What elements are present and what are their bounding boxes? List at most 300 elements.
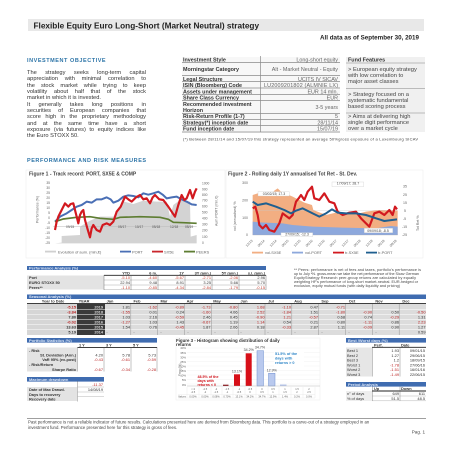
- period analysis table: 611: [419, 391, 425, 396]
- seasonal analysis table: --: [375, 331, 377, 335]
- investment style table: 3-5 years: [316, 105, 338, 111]
- performance analysis table: Port: [29, 275, 37, 280]
- histogram axis table: 1: [284, 387, 286, 391]
- best worst days table: 1.2: [394, 358, 399, 363]
- histogram axis table: 1: [272, 390, 274, 394]
- histogram axis table: <-3: [191, 387, 195, 391]
- figure 3 histogram: 34.2%: [244, 348, 255, 352]
- portfolio statistics table: -0.28: [147, 367, 156, 372]
- histogram axis table: 0.5: [260, 390, 264, 394]
- best worst days table: 16/01/16: [410, 367, 425, 372]
- seasonal analysis table: Oct: [349, 299, 356, 304]
- seasonal analysis table: 0.68: [337, 314, 345, 319]
- seasonal analysis table: -1.80: [336, 309, 346, 314]
- performance analysis table: -0.15: [256, 285, 265, 290]
- histogram axis table: -1.5: [214, 390, 219, 394]
- investment style table: EUR: [327, 96, 338, 102]
- peers note: weighting HF's performance of long-short market-neutral. EUR-hedged or: [294, 280, 419, 284]
- histogram axis table: -1: [238, 387, 241, 391]
- figure 2 panel: 06/17: [329, 239, 338, 248]
- seasonal analysis table: [27, 294, 426, 335]
- figure 2 panel: 12/18: [365, 239, 374, 248]
- legend: [45, 249, 210, 254]
- seasonal analysis table: -0.80: [229, 304, 238, 309]
- portfolio statistics table: -0.67: [94, 367, 103, 372]
- seasonal analysis table: 2014: [94, 330, 104, 335]
- portfolio statistics table: Sharpe Ratio: [52, 367, 77, 372]
- figure 1 panel: [26, 170, 225, 258]
- investment objective paragraph: [27, 70, 146, 139]
- portfolio statistics table: - Risk/Return: [29, 362, 54, 367]
- disclaimer: [27, 418, 426, 430]
- investment style table: Risk-Return Profile (1-7): [183, 114, 245, 120]
- seasonal analysis table: 2016: [94, 319, 104, 324]
- figure 2 panel: 06/18: [353, 239, 362, 248]
- seasonal analysis table: 2.87: [310, 324, 318, 330]
- seasonal analysis table: 2015: [94, 324, 104, 330]
- seasonal analysis table: --: [240, 331, 242, 335]
- seasonal analysis table: -1.11: [363, 319, 372, 324]
- seasonal analysis table: -0.45: [175, 324, 184, 330]
- performance analysis table: 5.70: [257, 280, 266, 285]
- best worst days table: Date: [401, 342, 410, 347]
- seasonal analysis table: -0.89: [175, 304, 184, 309]
- best worst days table: Best 2: [347, 353, 358, 358]
- callouts: 27/09/15; -12.3: [285, 233, 309, 237]
- histogram axis table: -2: [204, 390, 207, 394]
- portfolio statistics table: [27, 338, 157, 372]
- seasonal analysis table: 0.86: [391, 319, 399, 324]
- seasonal analysis table: 0.76: [149, 324, 157, 330]
- histogram axis table: 0.5: [271, 387, 275, 391]
- histogram axis table: 2: [308, 387, 310, 391]
- period analysis table: Down: [401, 386, 412, 391]
- maximum drawdown table: Maximum drawdown: [29, 377, 69, 382]
- legend: SX5E: [164, 249, 174, 254]
- figure 3 histogram: [176, 338, 320, 400]
- seasonal analysis table: 1.87: [203, 324, 210, 330]
- investment objective paragraph: The strategy seeks long-term capital: [27, 70, 146, 76]
- best worst days table: 1.27: [391, 353, 399, 358]
- performance analysis table: EURO STOXX 50: [29, 280, 60, 285]
- seasonal analysis table: 2.23: [418, 319, 426, 324]
- figure 2 panel: 06/15: [281, 239, 290, 248]
- seasonal analysis table: YEAR: [79, 299, 90, 304]
- seasonal analysis table: -0.33: [282, 324, 291, 330]
- histogram axis table: 2.5: [307, 390, 311, 394]
- investment style table: Legal Structure: [183, 77, 223, 83]
- seasonal analysis table: 2017: [94, 314, 103, 319]
- fund feature 3: single digit performance: [348, 120, 409, 126]
- figure 1 panel: 10: [46, 206, 50, 210]
- seasonal analysis table: 1.31: [418, 314, 426, 319]
- seasonal analysis table: 4.06: [230, 309, 238, 314]
- fund feature 3: over a market cycle: [348, 126, 398, 132]
- histogram axis table: 0.08%: [212, 394, 220, 398]
- page number: Pag. 1: [412, 430, 425, 434]
- seasonal analysis table: 1.27: [418, 324, 426, 330]
- performance analysis table: 2.96: [257, 275, 265, 280]
- best worst days table: 09/01/15: [410, 348, 425, 353]
- callouts: 03/02/15; 17.3: [263, 192, 285, 196]
- blue callout: 51.5% of the: [275, 352, 297, 356]
- fund feature 1: with low correlation to: [348, 73, 403, 79]
- fund feature 2: > Strategy focused on a: [348, 92, 409, 98]
- portfolio statistics table: Portfolio Statistics (%): [29, 338, 72, 343]
- investment style table: 15/07/19: [317, 126, 338, 132]
- seasonal analysis table: -0.59: [175, 314, 184, 319]
- portfolio statistics table: 5.78: [122, 352, 130, 358]
- seasonal analysis table: -1.60: [202, 309, 211, 314]
- figure 1 panel: 700: [202, 199, 208, 203]
- investment style table: [182, 56, 340, 133]
- best worst days table: 27/06/16: [410, 362, 425, 367]
- seasonal analysis table: -1.84: [282, 309, 292, 314]
- performance analysis table: 3.25: [203, 280, 211, 285]
- histogram axis table: -0.5: [237, 390, 242, 394]
- figure 3 histogram: 30%: [180, 356, 186, 360]
- seasonal analysis table: -1.55: [121, 309, 130, 314]
- best worst days table: Best 3: [347, 358, 358, 363]
- figure 1 panel: 0: [202, 241, 204, 245]
- histogram axis table: 34.7%: [258, 394, 266, 398]
- performance analysis table: -4.34: [175, 285, 185, 290]
- blue callout: days with: [275, 356, 293, 360]
- figure 1 panel: 1000: [202, 181, 210, 185]
- period analysis table: Period Analysis: [348, 382, 379, 387]
- seasonal analysis table: -0.50: [417, 309, 426, 314]
- figure 2 panel: 0: [246, 233, 248, 237]
- maximum drawdown table: [27, 377, 104, 402]
- figure 2 panel: -5: [403, 217, 406, 221]
- maximum drawdown table: Days to recovery: [29, 392, 61, 397]
- investment style table: Assets under management: [183, 89, 252, 95]
- seasonal analysis table: -0.67: [202, 319, 210, 324]
- seasonal analysis table: Dec: [402, 299, 410, 304]
- best worst days table: -1.49: [390, 372, 399, 377]
- investment style table: Alt - Market Neutral - Equity: [272, 67, 338, 73]
- peers note: ** Peers: performance is net of fees and taxes, portfolio's performance is: [294, 268, 421, 272]
- histogram axis table: -0.5: [248, 387, 253, 391]
- performance analysis table: 9.48: [149, 280, 157, 285]
- seasonal analysis table: 1.51: [310, 309, 318, 314]
- seasonal analysis table: 1.11: [338, 324, 345, 330]
- portfolio statistics table: 1 Y: [79, 342, 85, 348]
- performance analysis table: -4.60: [148, 275, 158, 280]
- seasonal analysis table: --: [214, 331, 216, 335]
- investment style table: ISIN (Bloomberg) Code: [183, 83, 242, 89]
- seasonal analysis table: -1.10: [282, 304, 292, 309]
- investment objective paragraph: volatility about half that of the stock: [27, 89, 146, 95]
- figure 3 histogram: 40%: [180, 346, 186, 350]
- investment style table: Morningstar Category: [183, 67, 239, 73]
- figure 1 panel: 0: [48, 216, 50, 220]
- seasonal analysis table: 0.45: [230, 314, 238, 319]
- figure 2 panel: vol-PORT: [305, 250, 323, 255]
- histogram axis table: -2.5: [191, 390, 196, 394]
- portfolio statistics table: -0.43: [94, 357, 103, 362]
- seasonal analysis table: 2.06: [230, 324, 238, 330]
- investment objective paragraph: exposure (via futures) to equity indices like: [27, 127, 146, 133]
- best worst days table: 18/09/15: [410, 358, 425, 363]
- performance analysis table: 5.66: [230, 280, 238, 285]
- bars: [223, 351, 286, 386]
- best worst days table: 22/06/15: [410, 372, 425, 377]
- figure 2 panel: tr-PORT: [378, 250, 393, 255]
- histogram axis table: -1: [226, 390, 229, 394]
- callouts: 17/09/17; 28.7: [337, 182, 359, 186]
- legend: PORT: [132, 249, 143, 254]
- seasonal analysis table: 1.68: [257, 304, 264, 309]
- fund feature 2: [348, 92, 409, 110]
- figure 1 panel: -5: [47, 221, 50, 225]
- peers note: up to July *N. gross-mean we take the net performance of the Sicav German: [294, 272, 419, 276]
- figure 2 panel: 06/16: [305, 239, 314, 248]
- red callout: 48.5% of the: [198, 375, 218, 379]
- histogram axis table: 2: [296, 390, 298, 394]
- figure 1 panel: 25: [46, 191, 50, 195]
- seasonal analysis table: -5.15: [67, 304, 77, 309]
- performance analysis table: YTD: [122, 270, 130, 275]
- investment style table: Long-short equity: [296, 58, 338, 64]
- seasonal analysis table: Jan: [107, 299, 114, 304]
- figure 1 panel: 05/17: [118, 225, 126, 229]
- seasonal analysis table: --: [294, 331, 296, 335]
- seasonal analysis table: -0.71: [336, 304, 345, 309]
- performance analysis table: -2.71: [202, 275, 211, 280]
- investment objective paragraph: appreciation with minimal correlation to: [27, 76, 146, 82]
- histogram axis table: 0.00%: [201, 394, 209, 398]
- figure 1 panel: 800: [202, 193, 208, 197]
- investment style table: Recommended investment: [183, 102, 252, 108]
- figure 2 panel: 06/14: [257, 239, 266, 248]
- period analysis table: [346, 382, 426, 401]
- performance analysis table: -5.10: [121, 275, 131, 280]
- seasonal analysis table: -0.02: [67, 319, 77, 324]
- figure 1 panel: 05/19: [185, 225, 193, 229]
- fund feature 2: systematic fundamental: [348, 98, 408, 104]
- seasonal analysis table: Mar: [161, 299, 168, 304]
- investment objective paragraph: and at the same time have a short: [27, 121, 146, 127]
- seasonal analysis table: -1.27: [121, 319, 130, 324]
- seasonal analysis table: 1.03: [149, 319, 157, 324]
- figure 3 histogram: Figure 3 - Histogram showing distribution of daily: [176, 338, 280, 343]
- period analysis table: % of days: [347, 396, 364, 401]
- seasonal analysis table: Feb: [134, 299, 141, 304]
- histogram axis table: Values: [178, 394, 187, 398]
- figure 3 histogram: 20%: [180, 364, 186, 368]
- period analysis table: 649: [392, 391, 399, 396]
- figure 3 histogram: 25%: [180, 360, 186, 364]
- portfolio statistics table: VaR 95% (ex-post): [42, 357, 77, 362]
- histogram axis table: 0: [249, 390, 251, 394]
- figure 1 panel: -25: [45, 241, 50, 245]
- histogram axis table: 0.00%: [189, 394, 197, 398]
- figure 3 histogram: 12.9%: [267, 368, 278, 372]
- figure 2 panel: 5: [404, 209, 406, 213]
- seasonal analysis table: 1.19: [230, 319, 238, 324]
- red callout: [198, 375, 218, 387]
- histogram axis table: 0: [261, 387, 263, 391]
- portfolio statistics table: - Risk: [29, 348, 40, 353]
- red callout: returns < 0: [198, 383, 216, 387]
- maximum drawdown table: Recovery date: [29, 396, 56, 402]
- performance analysis table: -1.10: [121, 285, 131, 290]
- legend: Evolution of aum. (mln,€): [58, 249, 102, 254]
- figure 1 panel: -10: [45, 226, 50, 230]
- investment style table: Share Class Currency: [183, 96, 239, 102]
- best worst days table: -1.78: [390, 362, 399, 367]
- histogram axis table: 1.5: [295, 387, 299, 391]
- seasonal analysis table: 7.80: [68, 314, 76, 319]
- investment objective paragraph: the stock market while trying to keep: [27, 83, 146, 89]
- performance analysis table: 22.94: [120, 280, 131, 285]
- figure 1 panel: 400: [202, 216, 208, 220]
- histogram axis table: 0.0%: [306, 394, 313, 398]
- best worst days table: Perf.: [374, 342, 383, 347]
- figure 1 panel: 20: [46, 196, 50, 200]
- performance analysis table: -2.06: [229, 275, 238, 280]
- figure 1 panel: -15: [45, 231, 50, 235]
- figure 1 panel: 5: [48, 211, 50, 215]
- seasonal analysis table: Jul: [268, 299, 274, 304]
- fund feature 3: > Aims at delivering high: [348, 114, 410, 120]
- seasonal analysis table: Nov: [375, 299, 384, 304]
- figure 2 panel: 12/17: [341, 239, 350, 248]
- best worst days table: [346, 338, 426, 377]
- seasonal analysis table: 2.46: [203, 314, 210, 319]
- seasonal analysis table: 0.24: [176, 309, 185, 314]
- disclaimer: Past performance is not a reliable indicator of future results. Calculations presented here are derived from Bloomberg data. This portfolio is a carve-out of a strategy employed in an: [28, 420, 370, 425]
- peers note: exclusion, equity mutual funds (with daily liquidity and pricing): [294, 284, 401, 288]
- seasonal analysis table: --: [267, 331, 269, 335]
- figure 1 panel: 900: [202, 187, 208, 191]
- figure 3 histogram: 0%: [182, 383, 186, 387]
- performance analysis table: -5.67: [175, 275, 184, 280]
- performance analysis table: 3Y (ann.): [195, 270, 212, 275]
- fund features panel: [346, 57, 425, 132]
- performance analysis table: 6 m.: [149, 270, 157, 275]
- seasonal analysis table: 2.52: [257, 309, 264, 314]
- seasonal analysis table: -1.62: [148, 304, 157, 309]
- figure 3 histogram: 5%: [182, 378, 186, 382]
- seasonal analysis table: 1.43: [176, 319, 184, 324]
- figure 1 panel: 35: [46, 181, 50, 185]
- seasonal analysis table: 0.18: [257, 324, 264, 330]
- seasonal analysis table: --: [106, 331, 108, 335]
- investment objective paragraph: market in which it is invested.: [27, 95, 101, 101]
- disclaimer: investment fund. Performance presented here for this strategy is gross of fees.: [28, 425, 177, 430]
- figure 1 panel: 30: [46, 186, 50, 190]
- figure 1 panel: 300: [202, 222, 208, 226]
- portfolio statistics table: 5 Y: [133, 342, 139, 348]
- seasonal analysis table: 5.19: [68, 330, 77, 335]
- figure 2 panel: [226, 170, 423, 258]
- seasonal analysis table: 0.90: [391, 324, 400, 330]
- best worst days table: -1.51: [390, 367, 399, 372]
- histogram axis table: 12.9%: [269, 394, 277, 398]
- histogram axis table: -2: [215, 387, 218, 391]
- strategy footnote: (*) Between 28/11/14 and 15/07/19 this strategy represented an average 50%gross exposure of a Luxembourg SICAV: [183, 136, 418, 142]
- figure 1 panel: Performance (%): [36, 196, 40, 223]
- seasonal analysis table: 2019: [94, 304, 104, 309]
- figure 2 panel: vol (annualised) %: [233, 201, 237, 231]
- figure 1 panel: Figure 1 - Track record: PORT, SX5E & COMP: [29, 172, 137, 178]
- seasonal analysis table: Year to Date: [42, 299, 65, 304]
- investment style table: 28/11/14: [317, 120, 338, 126]
- seasonal analysis table: Jun: [241, 299, 248, 304]
- figure 3 histogram: 13.1%: [232, 370, 243, 374]
- figure 1 panel: 100: [202, 235, 208, 239]
- investment style table: Investment Style: [183, 58, 226, 64]
- figure 2 panel: 25: [403, 193, 407, 197]
- performance analysis table: 1Y: [179, 270, 184, 275]
- investment objective paragraph: the Euro STOXX 50.: [27, 133, 79, 139]
- figure 2 panel: 09/19: [389, 239, 398, 248]
- performance analysis table: -0.85: [148, 285, 157, 290]
- figure 1 panel: 15: [46, 201, 50, 205]
- portfolio statistics table: St. Deviation (Ann.): [40, 352, 77, 358]
- best worst days table: Best /Worst days (%): [348, 338, 388, 343]
- maximum drawdown table: 14/08/19: [88, 387, 103, 392]
- investment style table: EUR 14 mln.: [307, 89, 338, 95]
- portfolio statistics table: -0.59: [147, 357, 156, 362]
- figure 3 histogram: 15%: [180, 369, 186, 373]
- figure 2 panel: Figure 2 - Rolling daily 1Y annualised Tot Ret - St. Dev.: [228, 172, 358, 178]
- seasonal analysis table: 0.74: [364, 314, 373, 319]
- histogram axis table: -1.5: [225, 387, 230, 391]
- seasonal analysis table: 0.59: [418, 330, 426, 335]
- portfolio statistics table: 3 Y: [106, 342, 112, 348]
- best worst days table: 1.93: [391, 348, 399, 353]
- blue callout: returns > 0: [275, 361, 295, 365]
- performance analysis table: 8.91: [176, 280, 184, 285]
- best worst days table: 29/06/15: [410, 353, 425, 358]
- seasonal analysis table: --: [133, 331, 135, 335]
- seasonal analysis table: 0.50: [391, 309, 400, 314]
- callouts: 09/09/18; -8.5: [367, 229, 389, 233]
- seasonal analysis table: -0.90: [363, 309, 373, 314]
- histogram axis table: 0.70%: [223, 394, 231, 398]
- heading: performance and risk: PERFORMANCE AND RISK MEASURES: [27, 158, 147, 164]
- histogram axis table: 1.4%: [282, 394, 289, 398]
- seasonal analysis table: 1.14: [257, 319, 265, 324]
- figure 2 panel: 12/16: [317, 239, 326, 248]
- legend: PEERS: [196, 249, 210, 254]
- figure 2 panel: 15: [403, 201, 407, 205]
- investment style table: 5: [335, 114, 338, 120]
- blue callout: [274, 349, 304, 367]
- investment objective paragraph: It generally takes long positions in: [27, 102, 146, 108]
- seasonal analysis table: 13.63: [66, 324, 77, 330]
- figure 3 histogram: 10%: [180, 374, 186, 378]
- investment objective paragraph: score high in the proprietary methodology: [27, 114, 146, 120]
- period analysis table: 48.5: [417, 396, 425, 401]
- peers note: EquityStrategy Research peer-group returns are calculated by equally: [294, 276, 416, 280]
- seasonal analysis table: 1.54: [122, 324, 131, 330]
- seasonal analysis table: 2018: [94, 309, 104, 314]
- investment style table: LU2009201802 (ALMNIE LX): [264, 83, 338, 89]
- seasonal analysis table: 2.16: [149, 314, 157, 319]
- histogram axis table: 1.5: [283, 390, 287, 394]
- figure 2 panel: 12/13: [245, 239, 254, 248]
- figure 1 panel: 10/17: [135, 225, 143, 229]
- seasonal analysis table: 0.01: [149, 309, 157, 314]
- seasonal analysis table: --: [160, 331, 162, 335]
- histogram axis table: 34.2%: [246, 394, 254, 398]
- figure 2 panel: tr-SX5E: [345, 250, 359, 255]
- figure 1 panel: 12/18: [170, 225, 178, 229]
